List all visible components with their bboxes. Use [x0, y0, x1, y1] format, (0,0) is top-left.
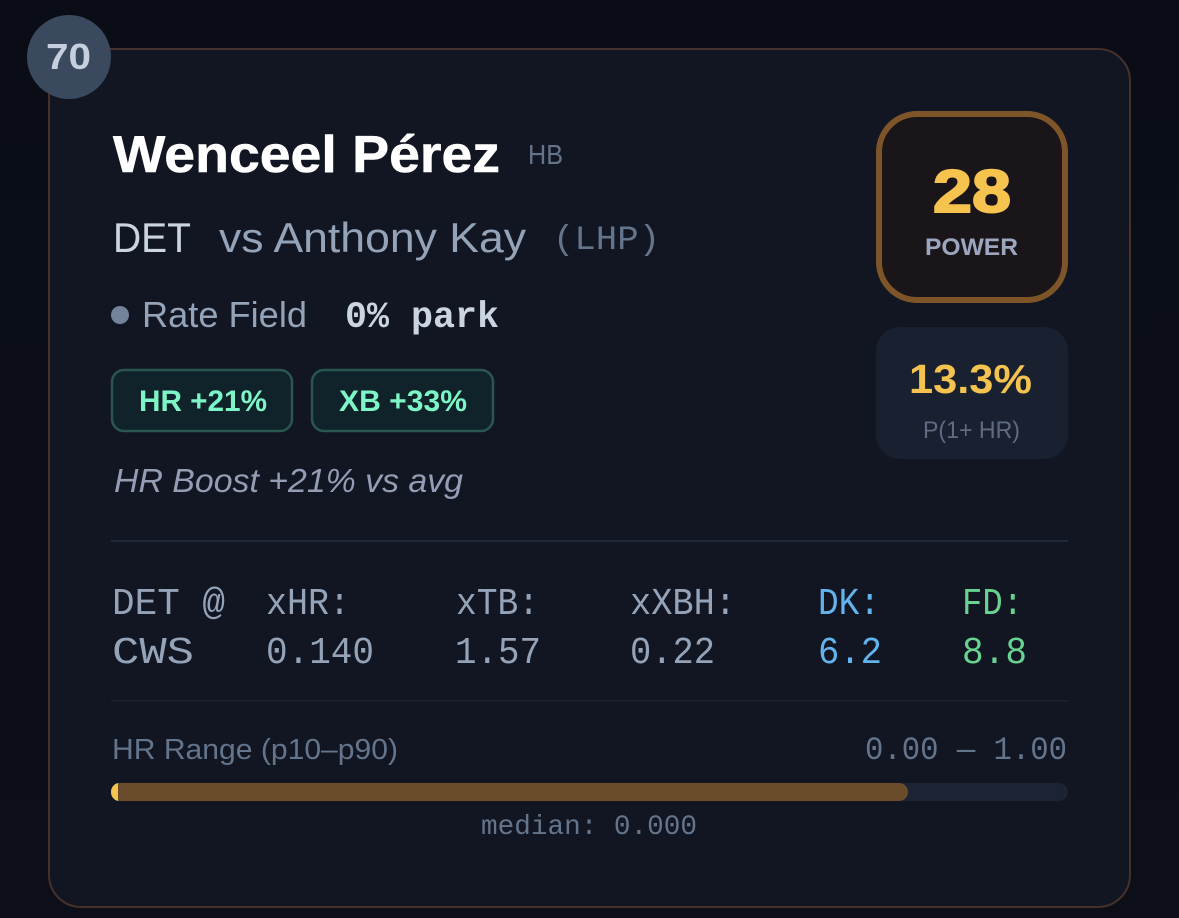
stat: xTB: 1.57 [455, 632, 541, 675]
HR probability box [876, 327, 1068, 459]
matchup line: vs Anthony Kay [219, 214, 526, 261]
stat: xXBH [630, 583, 736, 675]
heading: player name and position: HB [528, 139, 563, 170]
rank badge [27, 15, 111, 99]
stat: xHR: xHR: [266, 583, 350, 626]
power score box: POWER [925, 234, 1018, 261]
chip: XB boost: XB +33% [339, 385, 467, 418]
heading: player name and position: Wenceel Pérez [113, 126, 500, 184]
matchup line: (LHP) [553, 222, 660, 260]
rank badge: 70 [46, 36, 91, 77]
stat: game: DET @ [112, 583, 225, 626]
stat: DraftKings: 6.2 [818, 632, 882, 675]
stat: xXBH: xXBH: [630, 583, 736, 626]
stat: xXBH: 0.22 [630, 632, 715, 675]
stat: game: CWS [112, 632, 194, 675]
matchup line: DET [113, 214, 191, 261]
stat: xTB [455, 583, 541, 675]
chip: HR boost [112, 370, 292, 431]
weather and park line: Rate Field [142, 294, 307, 335]
stat: xHR [266, 583, 374, 675]
stat: FanDuel: 8.8 [962, 632, 1027, 675]
stat: xTB: xTB: [456, 583, 539, 626]
weather and park line: 0% park [345, 297, 499, 339]
stat: xHR: 0.140 [266, 632, 374, 675]
HR probability box: P(1+ HR) [923, 417, 1020, 444]
stat: FanDuel: FD: [962, 583, 1023, 626]
HR range chart: median: 0.000 [481, 812, 697, 843]
stat: game [112, 583, 225, 675]
note: HR boost: HR Boost +21% vs avg [114, 462, 464, 499]
power score box [879, 114, 1065, 300]
stat: DraftKings: DK: [818, 583, 880, 626]
chip: HR boost: HR +21% [139, 385, 267, 418]
HR range chart [111, 732, 1068, 843]
chip: XB boost [312, 370, 493, 431]
HR probability box: 13.3% [909, 356, 1032, 402]
HR range chart: HR Range (p10–p90) [112, 734, 398, 766]
power score box: 28 [933, 158, 1011, 225]
HR range chart: 0.00 — 1.00 [865, 732, 1067, 769]
weather and park line [111, 294, 499, 339]
matchup line [113, 214, 660, 261]
stat: DraftKings [818, 583, 882, 675]
stat: FanDuel [962, 583, 1027, 675]
